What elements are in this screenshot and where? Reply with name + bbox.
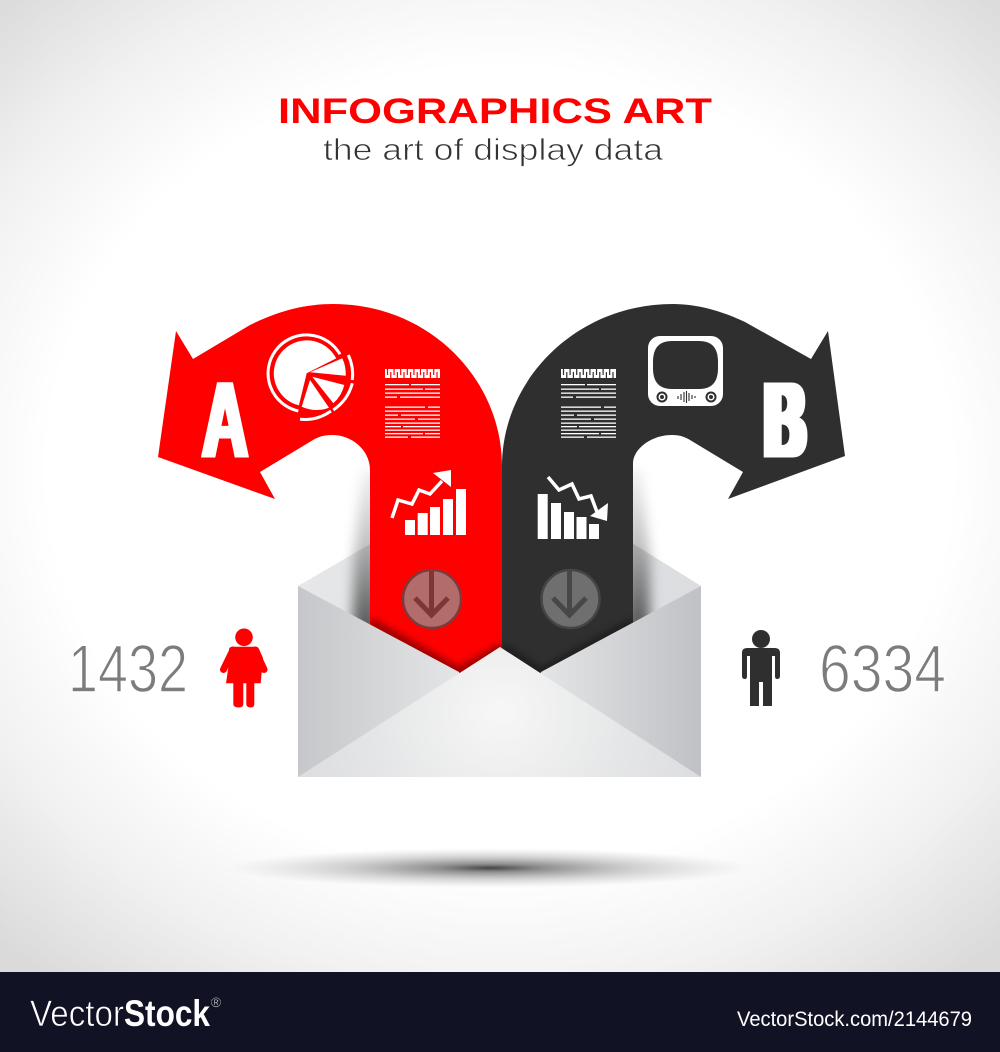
footer url: VectorStock.com/2144679 [737,1008,972,1031]
bottom flap [298,647,701,777]
icon: document text [561,369,616,438]
ribbon cast shadows [352,470,650,650]
icon: down arrow button [403,570,461,628]
right flap [530,586,701,777]
envelope back [298,470,701,700]
arrow B (dark) [502,304,845,680]
arrow A (red) [158,304,502,680]
envelope front [298,586,701,777]
value: 1432 [68,631,188,707]
left flap [298,586,470,777]
fold shading [502,622,633,672]
ground shadow [228,848,752,888]
icon: down arrow button [542,570,600,628]
letter B: B [765,359,805,480]
title: INFOGRAPHICS ART [278,92,712,131]
icon: pie chart [268,335,353,420]
icon: rising bar chart [392,470,466,535]
fold shading [370,622,502,672]
icon: document text [385,369,440,438]
value: 6334 [819,631,946,707]
footer logo: Stock [124,993,210,1034]
letter A: A [202,359,248,480]
footer band [0,972,1000,1052]
stat: 1432 [68,628,264,708]
footer logo [30,993,222,1034]
subtitle: the art of display data [323,132,664,167]
footer logo: Vector [30,993,124,1034]
footer logo: ® [211,994,222,1010]
icon: woman [224,628,264,708]
icon: man [742,630,780,706]
stat: 6334 [742,630,946,707]
icon: falling bar chart [538,477,608,539]
icon: television [648,336,723,406]
